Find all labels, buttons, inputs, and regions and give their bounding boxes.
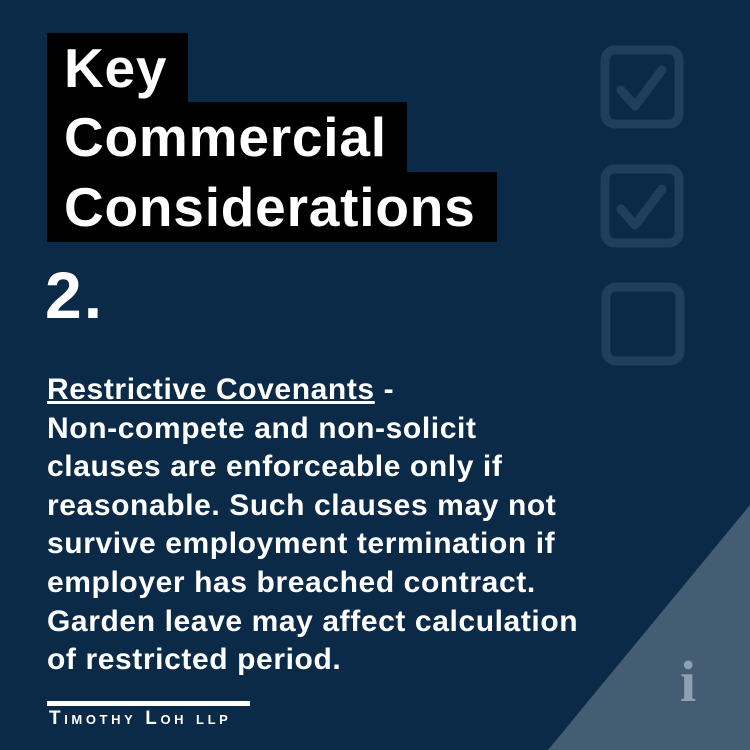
number: 2. bbox=[45, 258, 104, 332]
title bbox=[47, 33, 497, 242]
body text: survive employment termination if bbox=[47, 527, 555, 560]
body text bbox=[47, 373, 578, 676]
body text: clauses are enforceable only if bbox=[47, 450, 502, 483]
body text: Restrictive Covenants - bbox=[47, 373, 394, 406]
text: Considerations bbox=[64, 176, 476, 238]
footer logo bbox=[47, 701, 250, 729]
body text: of restricted period. bbox=[47, 643, 341, 676]
body text: Garden leave may affect calculation bbox=[47, 605, 578, 638]
body text: employer has breached contract. bbox=[47, 566, 536, 599]
icon: info: i bbox=[680, 649, 696, 714]
body text: reasonable. Such clauses may not bbox=[47, 489, 556, 522]
text: Key bbox=[64, 37, 167, 99]
footer logo: Timothy Loh llp bbox=[49, 708, 231, 729]
body text: Non-compete and non-solicit bbox=[47, 412, 477, 445]
text: Commercial bbox=[64, 106, 387, 168]
